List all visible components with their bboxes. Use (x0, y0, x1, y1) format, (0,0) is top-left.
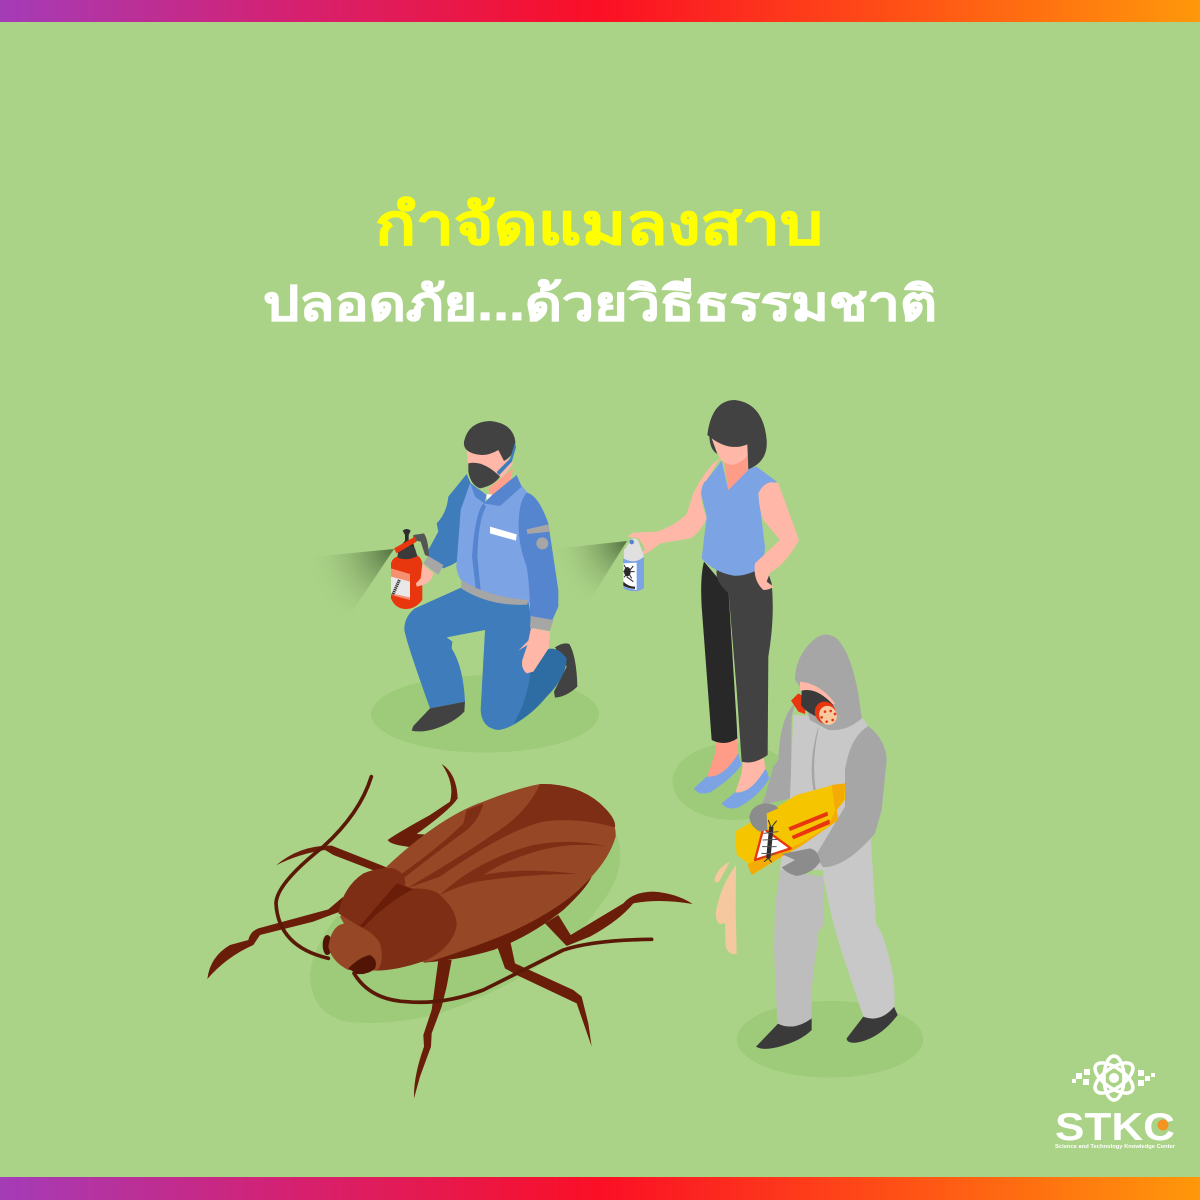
back lower leg (513, 649, 567, 724)
hood (795, 635, 862, 730)
face (467, 450, 513, 480)
trousers (404, 587, 533, 730)
upper left leg (276, 846, 387, 872)
thorax crease (360, 883, 413, 927)
upper antenna (276, 777, 371, 958)
mask strap block (791, 693, 807, 714)
neck (488, 468, 513, 497)
legs (207, 764, 693, 1098)
blue top (701, 461, 777, 576)
front leg (735, 755, 766, 793)
extended arm (627, 458, 720, 556)
man kneeling with sprayer (371, 421, 599, 753)
respirator (801, 690, 833, 718)
wing dark tip (407, 784, 615, 888)
bottom gradient bar (0, 1177, 1200, 1200)
orange dot (1158, 1120, 1168, 1130)
leaking liquid (714, 862, 737, 954)
can shoulder (623, 538, 644, 561)
centipede on label (393, 580, 399, 595)
sprayer nozzle (394, 537, 417, 553)
title line 1: กำจัดแมลงสาบ (375, 193, 823, 257)
wing veins (400, 803, 605, 895)
breast pocket (490, 527, 517, 541)
bag side shade (747, 783, 845, 875)
sprayer label top (391, 568, 410, 600)
filter face (816, 703, 840, 728)
cockroach abdomen underside (423, 877, 592, 963)
neck (724, 455, 748, 490)
sleeve badge (536, 537, 548, 549)
sprayer cap (397, 546, 417, 559)
sleeve band (527, 524, 550, 534)
mask strap (497, 443, 516, 475)
ground shadow (371, 675, 599, 753)
collar (470, 475, 522, 506)
sprayer plunger (400, 529, 415, 548)
spray cloud: pressure sprayer (300, 549, 394, 630)
bag stripe 1 (788, 812, 828, 831)
left arm (762, 703, 795, 805)
spray cloud: aerosol can (553, 541, 627, 616)
yellow bag (735, 783, 845, 875)
woman with spray can (623, 400, 799, 820)
can label (623, 563, 637, 590)
face opening (800, 682, 835, 710)
can body (623, 555, 644, 591)
pixel dots left (1072, 1069, 1090, 1085)
left cuff (423, 556, 443, 575)
warning triangle (755, 828, 791, 860)
title line 2: ปลอดภัย...ด้วยวิธีธรรมชาติ (263, 278, 937, 331)
spray can (623, 538, 644, 591)
pixel dots right (1138, 1070, 1155, 1086)
worker in protective suit (714, 635, 923, 1078)
thorax shield (350, 888, 457, 971)
lower antenna (354, 939, 652, 1002)
title (263, 193, 937, 331)
label stripe (623, 582, 635, 589)
STKC logo (1055, 1056, 1175, 1150)
atom emblem (1090, 1056, 1138, 1100)
sprayer label panel (391, 577, 410, 597)
long vein (440, 842, 605, 895)
right arm (815, 726, 887, 867)
upper vein (400, 803, 483, 878)
jacket torso (456, 480, 533, 603)
sprayer handle (413, 533, 429, 557)
filter holes (820, 710, 836, 723)
ground shadow (310, 832, 620, 1023)
lower middle leg 2 (497, 940, 592, 1047)
antennae (276, 777, 652, 1002)
eye (323, 935, 332, 955)
pronotum (338, 868, 405, 927)
torso (780, 715, 872, 870)
hair (464, 421, 515, 461)
left leg (774, 870, 823, 1027)
sprayer body (391, 555, 422, 609)
upper right leg (388, 764, 458, 847)
head (328, 923, 382, 971)
spider body (624, 567, 631, 576)
left shoe (756, 1018, 812, 1049)
right cuff (530, 616, 553, 631)
lower front leg (414, 960, 452, 1098)
undershirt (486, 494, 492, 503)
centipede (761, 820, 778, 862)
lit trouser leg (716, 570, 773, 762)
right glove (782, 848, 820, 876)
can nozzle (629, 540, 634, 544)
jacket zipper strip (472, 503, 486, 591)
hand on waist arm (755, 482, 799, 590)
face (712, 438, 748, 465)
logo tagline: Science and Technology Knowledge Center (1055, 1144, 1175, 1150)
cockroach wings (340, 784, 616, 963)
hair (707, 400, 767, 469)
right shoe (847, 1007, 898, 1043)
filter rim (811, 698, 839, 727)
pressure sprayer (391, 529, 429, 609)
right sleeve (519, 493, 558, 622)
cockroach (207, 764, 693, 1098)
ground shadow (672, 743, 794, 820)
spider icon (623, 565, 635, 582)
top gradient bar (0, 0, 1200, 22)
front shoe (722, 768, 769, 809)
back shoe (694, 753, 742, 794)
respirator mask (468, 463, 500, 488)
right leg (823, 837, 895, 1019)
left arm (428, 474, 471, 568)
mid left leg (207, 897, 343, 979)
front shoe (412, 702, 465, 731)
atom nucleus (1109, 1073, 1119, 1083)
back shoe (554, 643, 577, 698)
mouth (348, 955, 376, 974)
left glove (749, 803, 778, 832)
back leg (707, 738, 738, 778)
jacket belt (461, 580, 527, 605)
STKC wordmark: STKC (1055, 1106, 1175, 1149)
lower right leg 1 (545, 892, 693, 946)
dark trouser leg (701, 562, 737, 743)
hand on knee (518, 628, 550, 673)
suit zipper (812, 727, 818, 790)
holding hand (416, 564, 433, 587)
ground shadow (737, 1001, 923, 1078)
bag stripe 2 (792, 819, 830, 839)
